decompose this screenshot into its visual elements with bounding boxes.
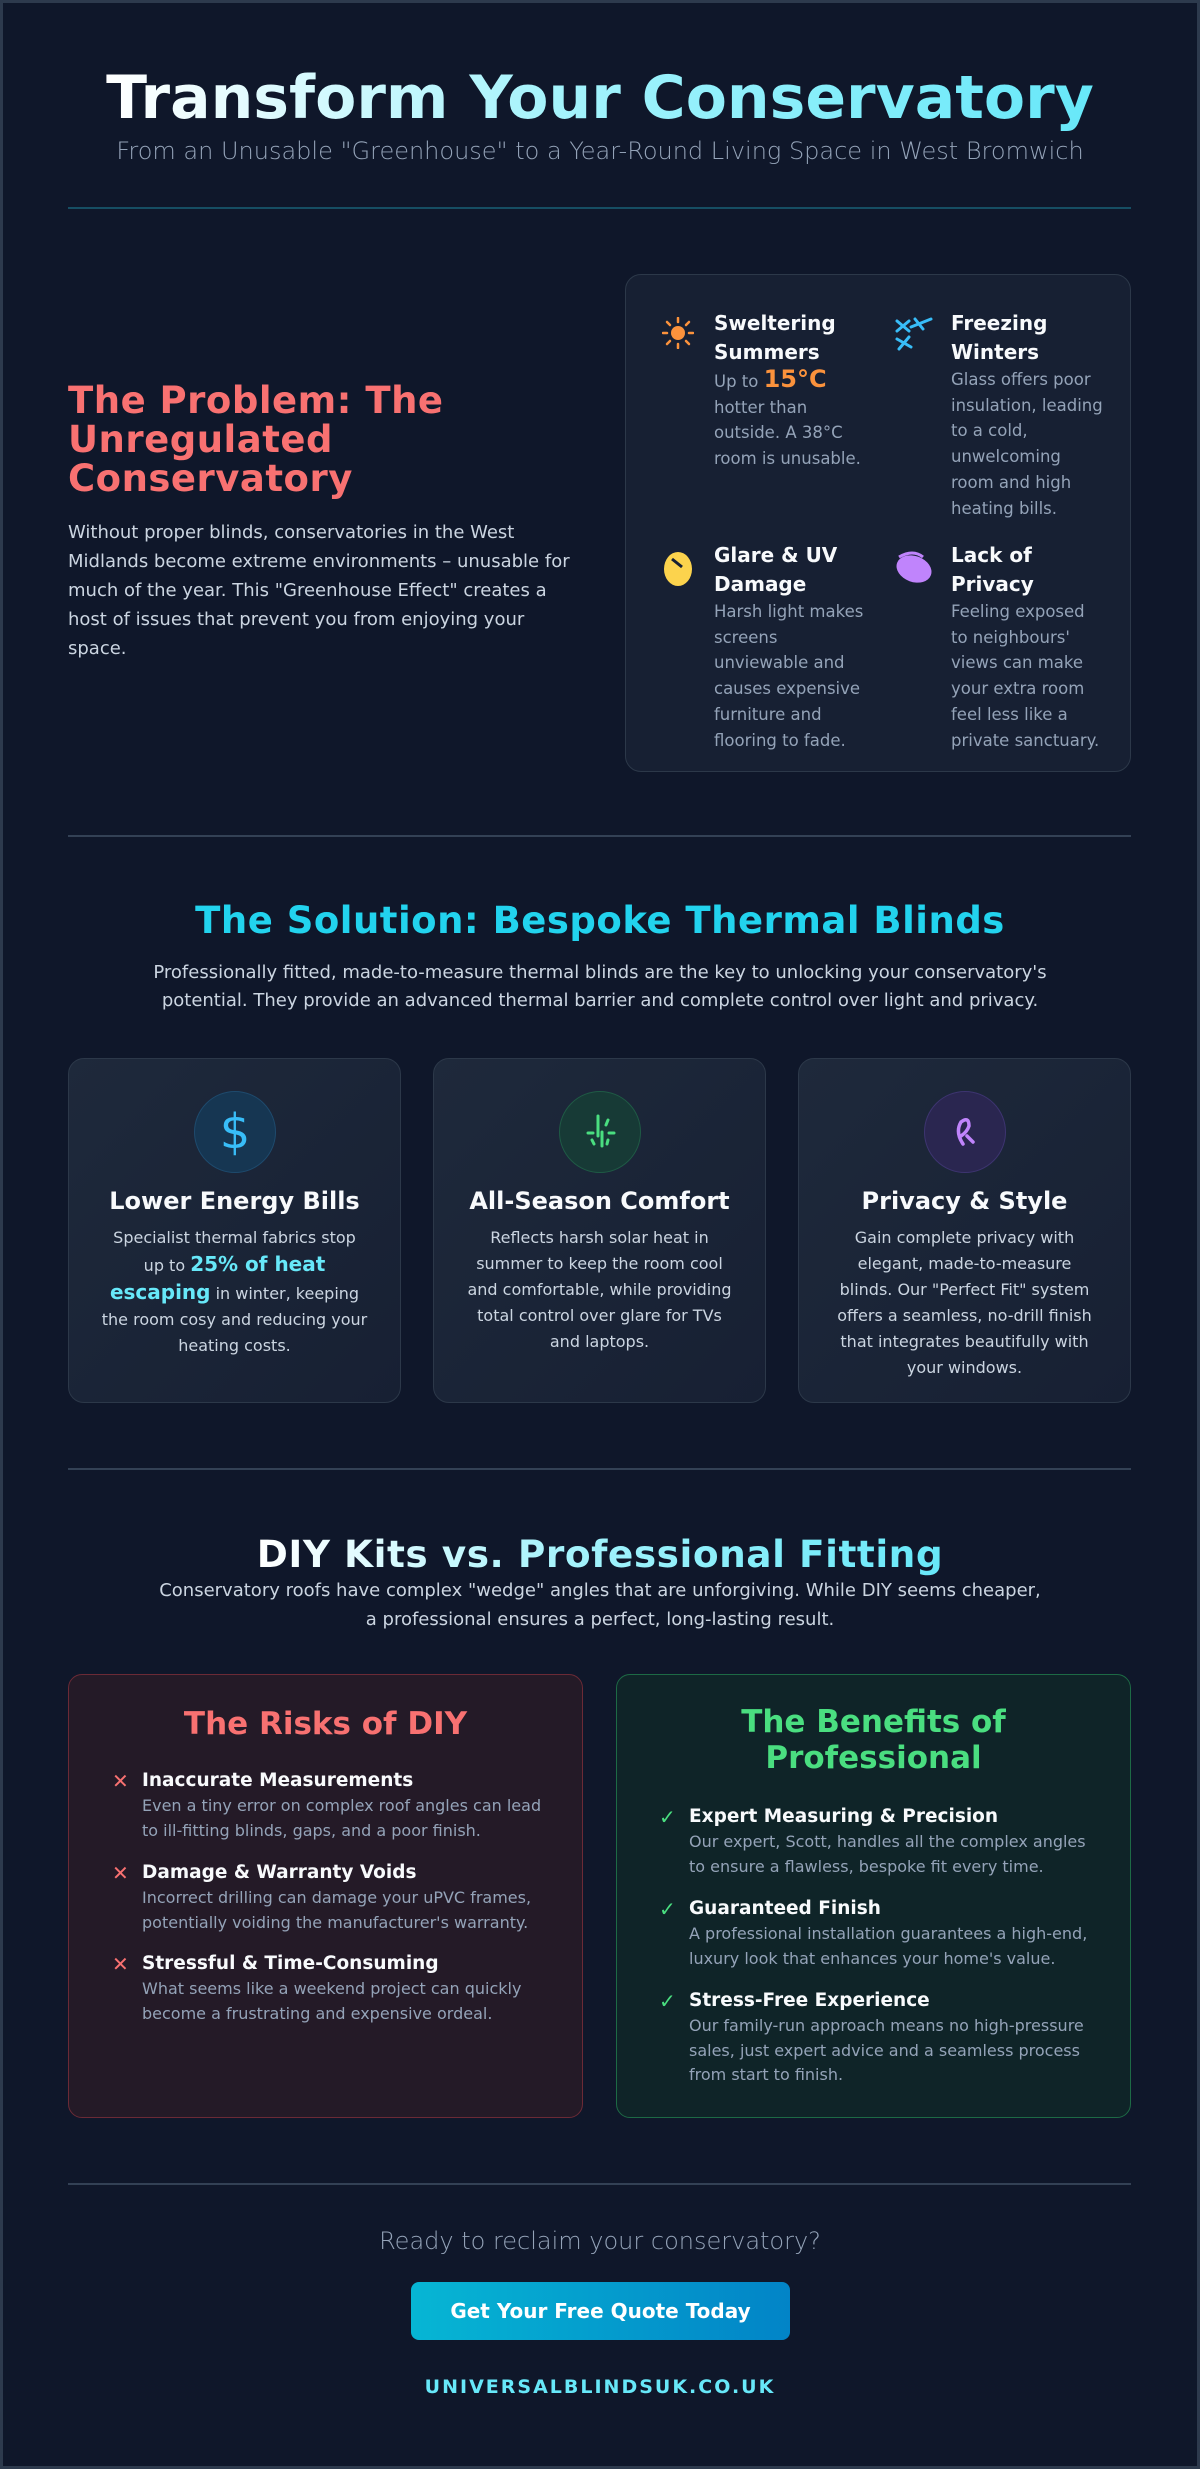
risk item 1: Inaccurate Measurements bbox=[142, 1770, 413, 1791]
card: comfort: Reflects harsh solar heat in bbox=[490, 1228, 709, 1247]
panel: benefits of professional bbox=[616, 1674, 1131, 2118]
risk item 1: Even a tiny error on complex roof angles can lead to ill-fitting blinds, gaps, and a poor finish. bbox=[142, 1796, 541, 1840]
card: comfort: and laptops. bbox=[550, 1332, 649, 1351]
solution paragraph: potential. They provide an advanced thermal barrier and complete control over light and privacy. bbox=[162, 990, 1038, 1011]
benefit item 1: Our expert, Scott, handles all the complex angles to ensure a flawless, bespoke fit every time. bbox=[689, 1832, 1086, 1876]
solution heading: The Solution: Bespoke Thermal Blinds bbox=[195, 899, 1005, 942]
icon: privacy bbox=[896, 552, 932, 583]
issue: winters: Glass offers poor insulation, leading to a cold, unwelcoming room and high heating bills. bbox=[951, 370, 1103, 518]
solution paragraph: Professionally fitted, made-to-measure thermal blinds are the key to unlocking your conservatory's bbox=[153, 962, 1047, 983]
heading: benefits: The Benefits of bbox=[741, 1704, 1006, 1740]
card: energy bills: escaping in winter, keeping bbox=[110, 1280, 359, 1304]
subtitle: From an Unusable "Greenhouse" to a Year-Round Living Space in West Bromwich bbox=[116, 137, 1084, 165]
card: energy bills bbox=[68, 1058, 401, 1403]
card: privacy & style bbox=[798, 1058, 1131, 1403]
card: comfort: All-Season Comfort bbox=[469, 1187, 730, 1215]
card: energy bills: heating costs. bbox=[178, 1336, 291, 1355]
benefit item 1: Expert Measuring & Precision bbox=[689, 1806, 998, 1827]
issue: winters: Freezing Winters bbox=[951, 311, 1047, 364]
problem paragraph: Without proper blinds, conservatories in the West Midlands become extreme environments – unusable for much of the year. This "Greenhouse Effect" creates a host of issues that prevent you from enjoying your space. bbox=[68, 522, 570, 659]
panel: problem issues bbox=[625, 274, 1131, 772]
issue: summers: Up to 15°C hotter than outside. A 38°C room is unusable. bbox=[714, 365, 861, 468]
icon: dollar: $ bbox=[220, 1104, 250, 1160]
CTA question: Ready to reclaim your conservatory? bbox=[379, 2227, 821, 2255]
benefit item 2: A professional installation guarantees a high-end, luxury look that enhances your home's value. bbox=[689, 1924, 1087, 1968]
benefit item 3 bbox=[659, 1989, 1084, 2084]
issue: glare bbox=[664, 543, 863, 750]
panel: benefits of professional: ✓ bbox=[659, 1805, 676, 1829]
card: privacy & style: Gain complete privacy with elegant, made-to-measure blinds. Our "Perfect Fit" system offers a seamless, no-drill finish that integrates beautifully with your windows. bbox=[837, 1228, 1092, 1377]
heading: benefits: Professional bbox=[765, 1740, 982, 1776]
panel: risks of DIY: ✕ bbox=[112, 1952, 129, 1976]
title: Transform Your Conservatory bbox=[106, 63, 1094, 133]
issue: glare: Harsh light makes screens unviewable and causes expensive furniture and flooring to fade. bbox=[714, 602, 863, 750]
panel: risks of DIY: ✕ bbox=[112, 1769, 129, 1793]
panel: benefits of professional: ✓ bbox=[659, 1897, 676, 1921]
heading: risks: The Risks of DIY bbox=[184, 1706, 467, 1742]
solution paragraph bbox=[153, 962, 1047, 1011]
risk item 3: Stressful & Time-Consuming bbox=[142, 1953, 439, 1974]
benefit item 3: Our family-run approach means no high-pressure sales, just expert advice and a seamless process from start to finish. bbox=[689, 2016, 1084, 2084]
issue: privacy bbox=[896, 543, 1099, 750]
DIY paragraph: Conservatory roofs have complex "wedge" angles that are unforgiving. While DIY seems cheaper, bbox=[159, 1580, 1041, 1601]
issue: summers: Sweltering Summers bbox=[714, 311, 836, 364]
issue: privacy: Feeling exposed to neighbours' views can make your extra room feel less like a private sanctuary. bbox=[951, 602, 1099, 750]
issue: glare: Glare & UV Damage bbox=[714, 543, 837, 596]
icon: glare bbox=[664, 552, 692, 586]
card: comfort bbox=[433, 1058, 766, 1403]
icon: dollar bbox=[194, 1091, 276, 1173]
DIY paragraph: a professional ensures a perfect, long-lasting result. bbox=[366, 1609, 834, 1630]
problem heading: The Problem: The Unregulated Conservatory bbox=[68, 379, 444, 500]
website url: UNIVERSALBLINDSUK.CO.UK bbox=[425, 2376, 775, 2398]
benefit item 2 bbox=[659, 1897, 1087, 1968]
DIY paragraph bbox=[159, 1580, 1041, 1630]
risk item 2 bbox=[112, 1861, 531, 1932]
icon: thermometer bbox=[559, 1091, 641, 1173]
icon: sun bbox=[662, 317, 694, 349]
issue: privacy: Lack of Privacy bbox=[951, 543, 1034, 596]
card: energy bills: Lower Energy Bills bbox=[109, 1187, 360, 1215]
icon: style bbox=[924, 1091, 1006, 1173]
panel: risks of DIY: ✕ bbox=[112, 1861, 129, 1885]
risk item 3 bbox=[112, 1952, 521, 2022]
issue: summers bbox=[662, 311, 861, 468]
benefit item 2: Guaranteed Finish bbox=[689, 1898, 881, 1919]
DIY heading: DIY Kits vs. Professional Fitting bbox=[257, 1532, 943, 1576]
CTA button bbox=[411, 2282, 790, 2340]
benefit item 3: Stress-Free Experience bbox=[689, 1990, 930, 2011]
card: energy bills: up to 25% of heat bbox=[144, 1252, 325, 1276]
card: energy bills: the room cosy and reducing your bbox=[102, 1310, 367, 1329]
panel: benefits of professional: ✓ bbox=[659, 1989, 676, 2013]
risk item 1 bbox=[112, 1769, 541, 1840]
benefit item 1 bbox=[659, 1805, 1086, 1876]
icon: snowflakes bbox=[895, 317, 932, 351]
risk item 3: What seems like a weekend project can quickly become a frustrating and expensive ordeal. bbox=[142, 1979, 521, 2022]
risk item 2: Incorrect drilling can damage your uPVC frames, potentially voiding the manufacturer's warranty. bbox=[142, 1888, 531, 1932]
card: privacy & style: Privacy & Style bbox=[862, 1187, 1067, 1215]
card: comfort: summer to keep the room cool bbox=[476, 1254, 723, 1273]
CTA button: Get Your Free Quote Today bbox=[450, 2299, 751, 2323]
heading: benefits bbox=[741, 1704, 1006, 1776]
panel: risks of DIY bbox=[68, 1674, 583, 2118]
risk item 2: Damage & Warranty Voids bbox=[142, 1862, 416, 1883]
card: comfort: and comfortable, while providing bbox=[467, 1280, 732, 1299]
issue: winters bbox=[895, 311, 1103, 518]
card: comfort: total control over glare for TVs bbox=[477, 1306, 722, 1325]
card: energy bills: Specialist thermal fabrics stop bbox=[113, 1228, 356, 1247]
